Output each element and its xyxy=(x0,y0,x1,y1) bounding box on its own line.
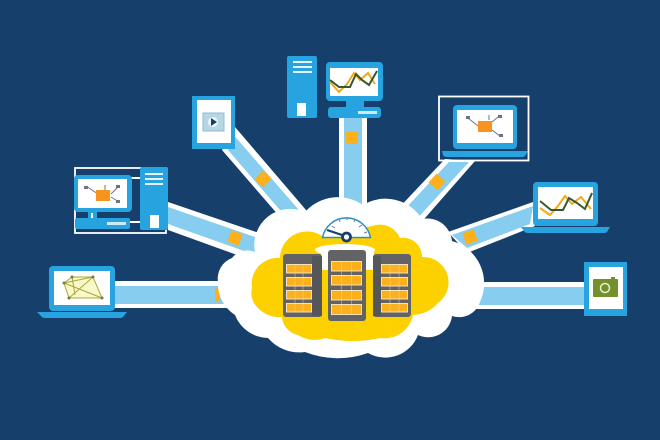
connector beam: camera tablet xyxy=(470,282,588,309)
device: framed desktop with tower xyxy=(74,167,168,233)
connector beam: left laptop xyxy=(112,281,227,308)
server rack: right xyxy=(373,254,411,317)
device: video tablet xyxy=(192,96,235,149)
connector beam: right laptop xyxy=(448,202,535,253)
device: right laptop with line chart xyxy=(521,182,610,233)
device: framed laptop xyxy=(439,96,528,160)
cloud: white outer xyxy=(218,197,484,358)
connector beam: left desktop xyxy=(168,202,262,264)
device: top tower xyxy=(287,56,317,118)
server rack: left xyxy=(283,254,322,317)
device: top monitor with line chart xyxy=(326,62,383,118)
server rack: middle xyxy=(328,250,366,321)
device: left laptop with network graph xyxy=(37,266,127,318)
device: camera tablet xyxy=(584,262,627,316)
connector beam: right framed laptop xyxy=(395,159,475,226)
connector beam: top desktop xyxy=(339,115,367,207)
connector beam: video tablet xyxy=(222,127,312,217)
speed gauge xyxy=(322,217,370,241)
cloud: yellow inner xyxy=(251,225,449,341)
